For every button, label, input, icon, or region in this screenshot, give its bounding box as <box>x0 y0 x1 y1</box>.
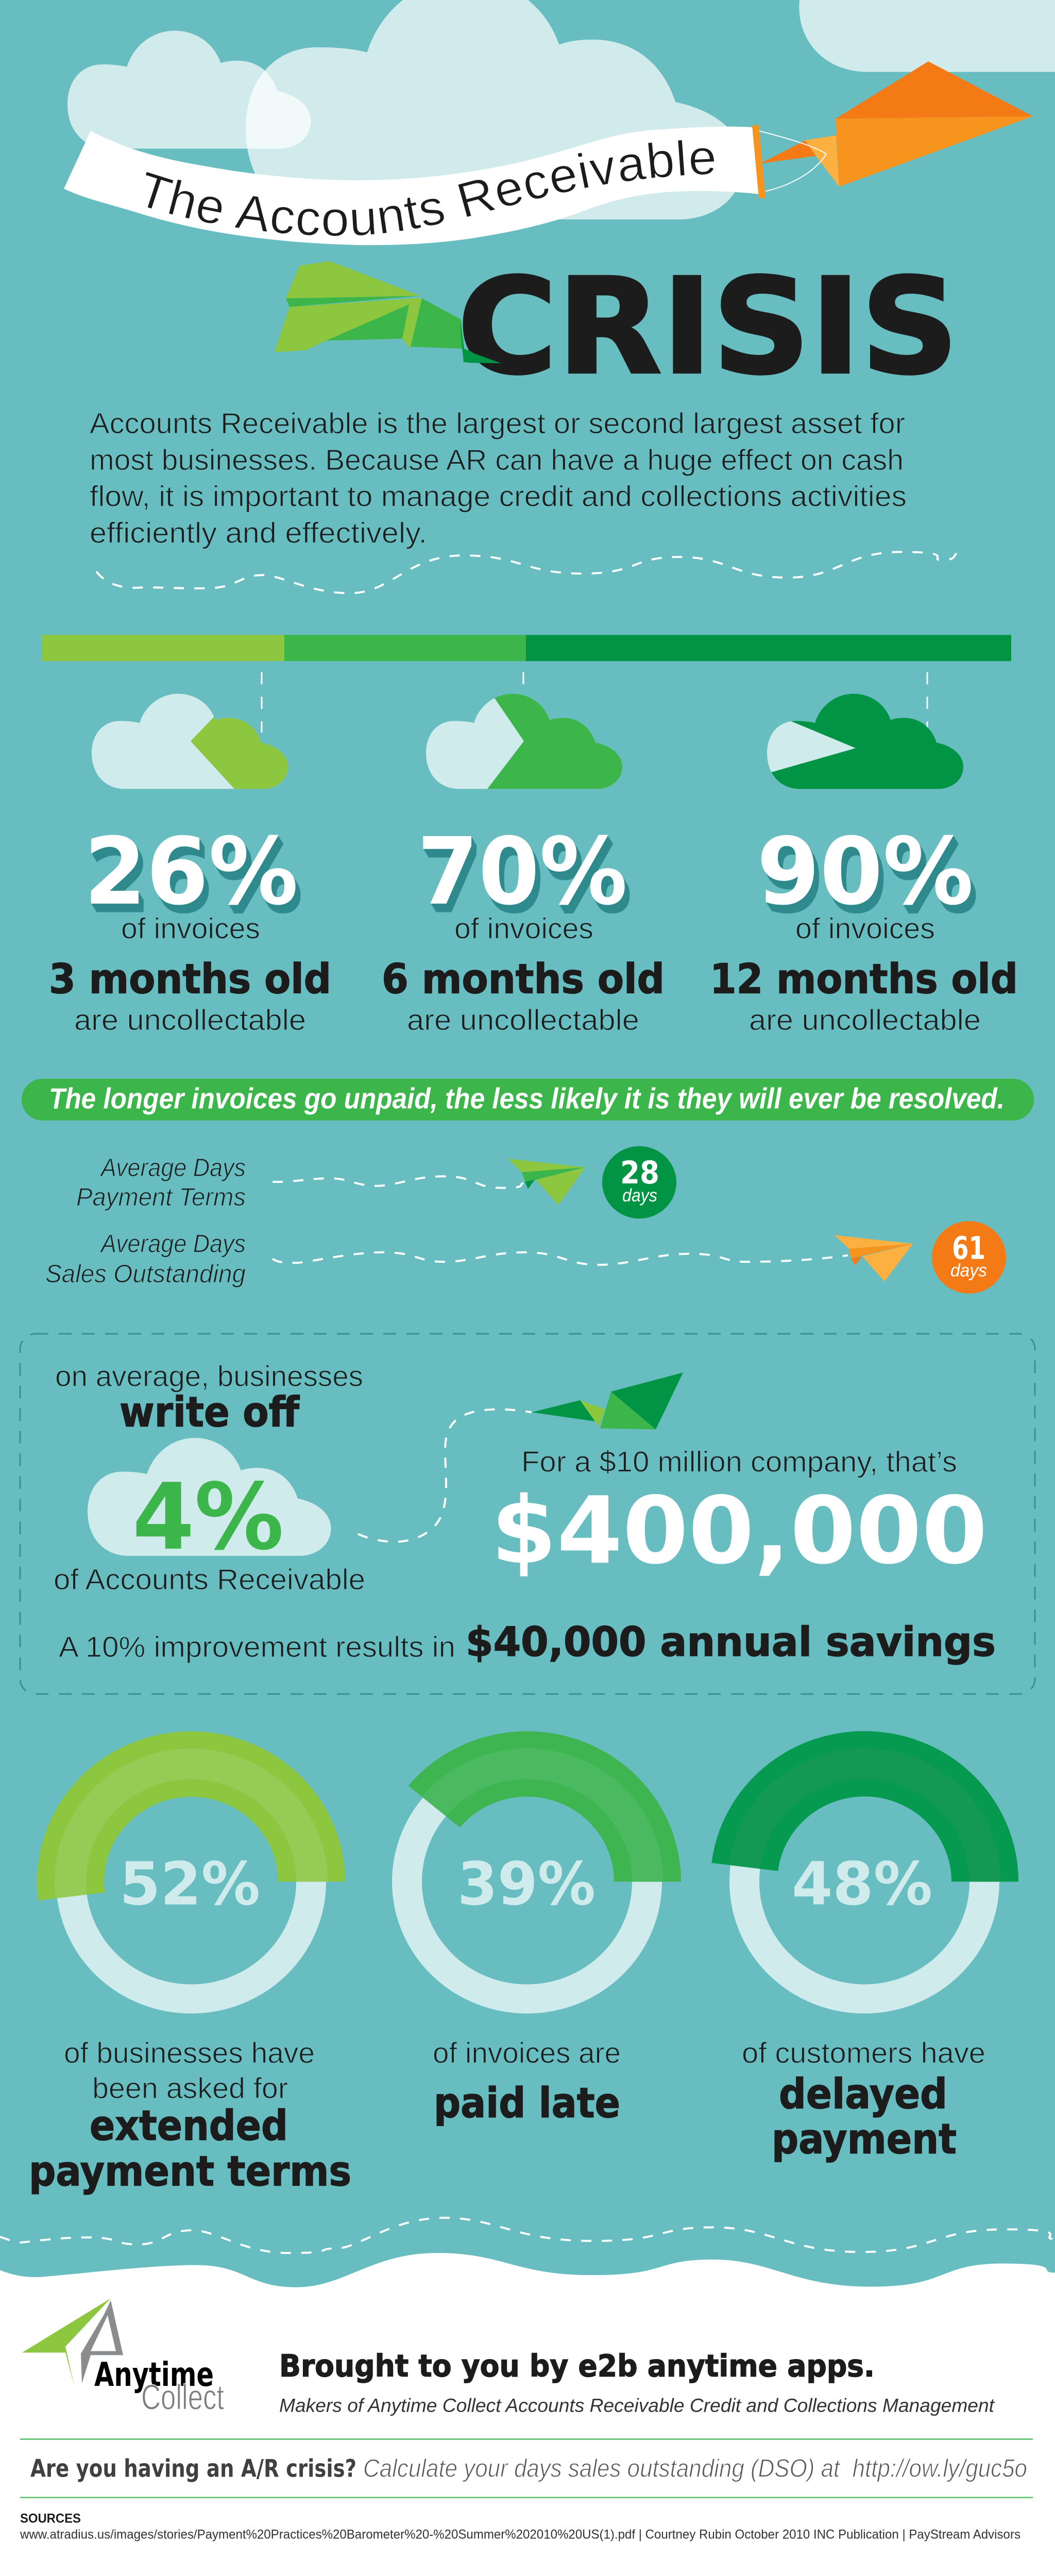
number: 26%: 26% <box>84 818 298 925</box>
icon: cloud 70% <box>426 694 622 789</box>
stat column: 70% 6 months <box>382 694 665 1037</box>
label: Payment Terms <box>76 1183 246 1211</box>
ring <box>407 1765 647 1999</box>
label: 12 months old: 12 months old <box>710 956 1018 1003</box>
text: a/r crisis question: Are you having an A/R crisis? <box>30 2455 356 2483</box>
text: makers of: Makers of Anytime Collect Accounts Receivable Credit and Collections Management <box>279 2395 995 2416</box>
cloud: large centre <box>246 0 743 219</box>
intro text <box>90 407 907 550</box>
banner plane with title <box>64 61 1033 245</box>
timeline bar <box>42 635 1011 661</box>
icon: green paper plane <box>275 261 501 363</box>
arc band <box>71 1764 312 1896</box>
number: 90%: 90% <box>757 818 974 925</box>
icon: cloud <box>88 1438 331 1556</box>
label: of invoices: of invoices <box>454 912 593 945</box>
label: Average Days <box>99 1154 246 1182</box>
label: 6 months old: 6 months old <box>382 956 665 1003</box>
intro text: efficiently and effectively. <box>90 517 427 550</box>
label: payment <box>772 2116 957 2163</box>
logo: anytime collect <box>22 2298 224 2417</box>
label: of invoices are <box>433 2037 621 2070</box>
text: of accounts receivable: of Accounts Receivable <box>54 1564 365 1596</box>
text: write off: write off <box>120 1388 300 1436</box>
label: of invoices: of invoices <box>795 912 935 945</box>
label: are uncollectable: are uncollectable <box>749 1004 981 1037</box>
badge: 61 days: 61 <box>952 1230 985 1266</box>
intro text: Accounts Receivable is the largest or second largest asset for <box>90 407 905 440</box>
label: paid late <box>434 2079 620 2127</box>
flight path <box>358 1409 532 1542</box>
label: of customers have <box>742 2037 985 2070</box>
badge: 61 days <box>932 1221 1006 1294</box>
label: delayed <box>779 2071 947 2119</box>
label: are uncollectable: are uncollectable <box>74 1004 306 1037</box>
banner pole <box>752 125 765 198</box>
number: 39% <box>457 1850 595 1919</box>
badge: 28 days: 28 <box>620 1155 659 1191</box>
badge: 61 days: days <box>950 1260 987 1280</box>
row: average days payment terms <box>76 1146 676 1218</box>
kite plane: orange <box>760 61 1033 187</box>
title: crisis: CRISIS <box>457 251 959 404</box>
text: 10% improvement: A 10% improvement results in <box>59 1631 455 1664</box>
label <box>29 2037 351 2196</box>
arc band <box>434 1764 648 1882</box>
icon: plane <box>532 1372 683 1429</box>
text: brought to you by: Brought to you by e2b anytime apps. <box>279 2348 875 2383</box>
label: 3 months old: 3 months old <box>49 956 331 1003</box>
cloud: top right <box>799 0 1055 72</box>
number: 48% <box>792 1850 932 1919</box>
label: payment terms <box>29 2148 351 2196</box>
donut: 48% <box>742 1764 985 2163</box>
text: $40,000 annual savings: $40,000 annual savings <box>466 1619 996 1666</box>
logo: anytime collect: Anytime <box>94 2355 214 2394</box>
row: average days sales outstanding <box>45 1221 1006 1294</box>
clouds: sky <box>67 0 1055 219</box>
intro text: flow, it is important to manage credit and collections activities <box>90 480 907 513</box>
icon: green plane <box>508 1159 585 1205</box>
intro text: most businesses. Because AR can have a huge effect on cash <box>90 444 904 477</box>
badge: 28 days: days <box>622 1185 657 1206</box>
icon: orange plane <box>835 1235 913 1281</box>
stat column: 90% 12 months <box>710 694 1018 1037</box>
label: been asked for <box>92 2072 288 2105</box>
text: for a $10 million company: For a $10 million company, that’s <box>521 1446 957 1478</box>
icon: cloud 90% <box>767 694 963 789</box>
donut: 39% <box>407 1764 648 2127</box>
title: the accounts receivable: The Accounts Receivable <box>145 140 714 236</box>
label <box>76 1154 246 1211</box>
badge: 28 days <box>602 1146 676 1218</box>
icon: cloud 26% <box>92 694 288 789</box>
sources heading: SOURCES <box>20 2512 81 2526</box>
label: of businesses have <box>64 2037 315 2070</box>
number: $400,000: $400,000 <box>491 1477 988 1585</box>
number: 4%: 4% <box>132 1464 284 1570</box>
banner strings <box>759 131 826 191</box>
flight path <box>273 1176 523 1188</box>
label <box>433 2037 621 2127</box>
arc band <box>744 1764 985 1882</box>
banner ribbon <box>64 127 760 245</box>
flight path <box>273 1252 848 1265</box>
label: extended <box>90 2102 288 2150</box>
label <box>742 2037 985 2163</box>
ring <box>744 1765 984 1999</box>
text: on average, businesses: on average, businesses <box>55 1360 363 1393</box>
number: 70%: 70% <box>417 818 627 925</box>
cloud: left <box>67 31 311 148</box>
number: 52% <box>120 1850 260 1919</box>
ring <box>71 1765 311 1999</box>
donut: 52% <box>29 1764 351 2196</box>
footer panel <box>0 2253 1055 2576</box>
panel: write off <box>20 1334 1035 1694</box>
label <box>45 1230 246 1288</box>
logo: anytime collect: Collect <box>141 2378 224 2417</box>
label: Sales Outstanding <box>45 1260 246 1288</box>
label: of invoices: of invoices <box>121 912 260 945</box>
stat column: 26% 3 months <box>49 694 331 1037</box>
label: are uncollectable: are uncollectable <box>407 1004 639 1037</box>
label: Average Days <box>99 1230 246 1258</box>
